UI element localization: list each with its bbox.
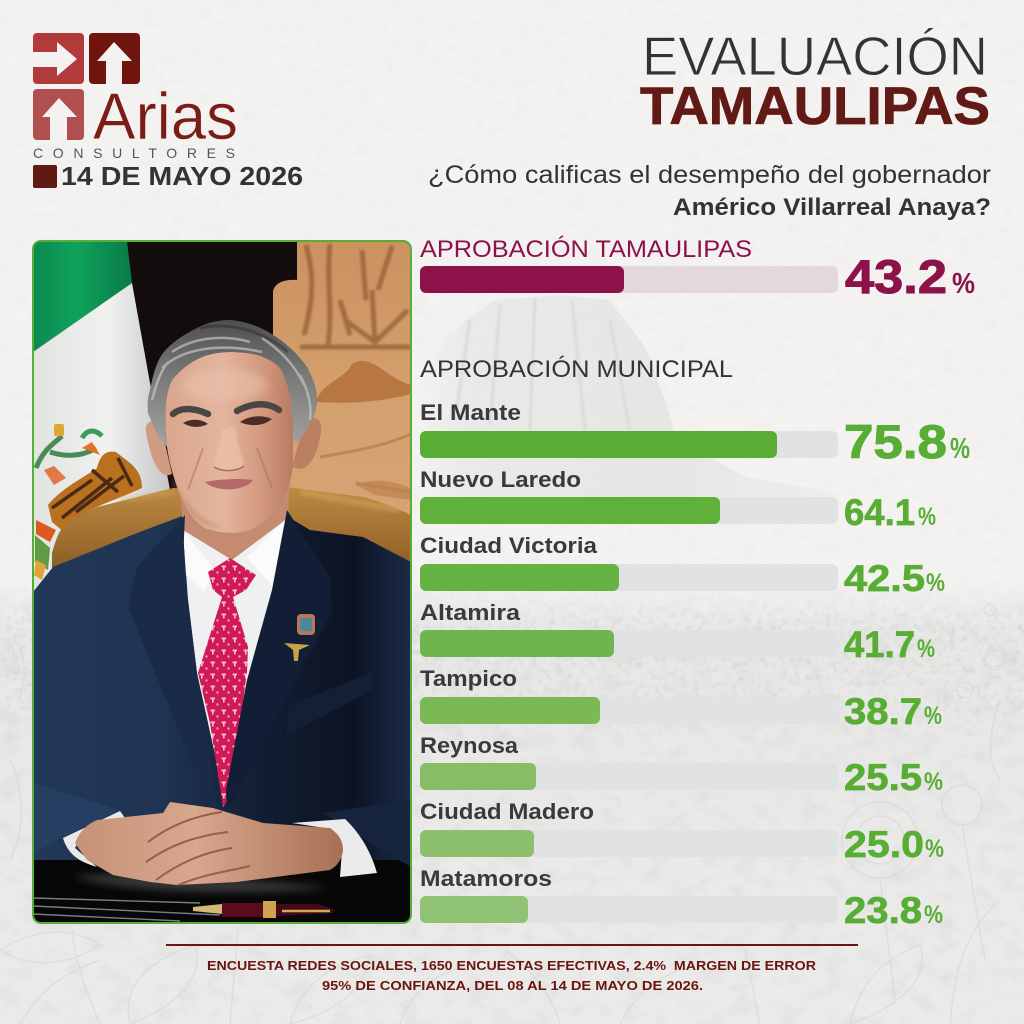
- collar and tie: [183, 517, 288, 807]
- heading: aprobación municipal: APROBACIÓN MUNICIPAL: [420, 356, 733, 383]
- icon: up arrow box dark: [89, 33, 140, 84]
- clasped hands: [75, 802, 343, 885]
- row: Matamoros: Matamoros: [420, 866, 552, 891]
- footer note: ENCUESTA REDES SOCIALES, 1650 ENCUESTAS EFECTIVAS, 2.4% MARGEN DE ERROR: [207, 958, 817, 973]
- desk: [33, 860, 411, 923]
- row: Tampico: [420, 666, 942, 732]
- row: Nuevo Laredo: 64.1: [844, 492, 915, 533]
- portrait photo: [33, 241, 411, 923]
- eyebrows: [173, 409, 208, 414]
- chair: [52, 487, 410, 568]
- icon: right arrow box: [33, 33, 84, 84]
- nose: [214, 426, 244, 471]
- logo subtitle: CONSULTORES: [33, 145, 235, 161]
- photo border: [33, 241, 411, 923]
- title: [640, 25, 990, 136]
- shirt cuffs: [63, 811, 377, 877]
- logo wordmark: Arias: [93, 79, 238, 153]
- row: Ciudad Madero: [420, 799, 944, 865]
- question: ¿Cómo calificas el desempeño del gobernador: [428, 161, 991, 189]
- row: Nuevo Laredo: Nuevo Laredo: [420, 467, 581, 492]
- flag: [33, 241, 170, 600]
- row: Nuevo Laredo: %: [918, 503, 936, 531]
- hair: [148, 320, 317, 447]
- row: Tampico: %: [924, 702, 942, 730]
- lapel pins: [284, 614, 315, 661]
- eyes: [183, 420, 208, 427]
- row: El Mante: %: [950, 433, 970, 465]
- row: Reynosa: [420, 733, 943, 798]
- background vegetation: [0, 604, 1005, 1024]
- row: El Mante: [420, 400, 970, 468]
- row: Altamira: %: [917, 635, 935, 663]
- row: Tampico: 38.7: [844, 691, 922, 732]
- heading: aprobación Tamaulipas: APROBACIÓN TAMAULIPAS: [420, 236, 752, 263]
- footer note: [166, 944, 858, 993]
- pen: [193, 901, 333, 918]
- background mountain: [418, 295, 838, 510]
- footer note: 95% DE CONFIANZA, DEL 08 AL 14 DE MAYO DE 2026.: [322, 978, 703, 993]
- suit: [33, 515, 411, 880]
- row: Reynosa: Reynosa: [420, 733, 519, 758]
- wood panel: [273, 242, 410, 514]
- municipal bar chart: [420, 400, 970, 931]
- row: Matamoros: [420, 866, 943, 931]
- question: Américo Villarreal Anaya?: [673, 194, 991, 221]
- row: Altamira: [420, 600, 935, 665]
- row: El Mante: El Mante: [420, 400, 521, 425]
- lapels: [128, 510, 372, 810]
- paper background: [0, 591, 1024, 1024]
- row: Ciudad Madero: %: [925, 835, 944, 863]
- bar: Tamaulipas: [420, 266, 838, 293]
- row: Matamoros: %: [924, 901, 943, 929]
- row: Reynosa: %: [924, 768, 943, 796]
- value: 43.2%: 43.2: [845, 250, 947, 303]
- state approval: [420, 236, 975, 303]
- row: Ciudad Victoria: Ciudad Victoria: [420, 533, 598, 558]
- logo: Arias Consultores: [33, 33, 238, 161]
- row: Ciudad Victoria: 42.5: [844, 558, 925, 599]
- row: Matamoros: 23.8: [844, 890, 922, 931]
- flag eagle: [34, 424, 142, 580]
- value: 43.2%: %: [952, 268, 975, 300]
- row: Altamira: 41.7: [844, 624, 915, 665]
- icon: up arrow box light: [33, 89, 84, 140]
- row: Ciudad Madero: 25.0: [844, 824, 924, 865]
- row: Tampico: Tampico: [420, 666, 517, 691]
- row: Altamira: Altamira: [420, 600, 521, 625]
- date: 14 DE MAYO 2026: [61, 161, 303, 191]
- sleeves: [33, 783, 411, 867]
- mouth: [205, 479, 253, 489]
- row: Reynosa: 25.5: [844, 757, 922, 798]
- row: Ciudad Victoria: %: [926, 569, 945, 597]
- row: Ciudad Madero: Ciudad Madero: [420, 799, 594, 824]
- question: [428, 161, 991, 221]
- row: Ciudad Victoria: [420, 533, 945, 599]
- title: TAMAULIPAS: [640, 77, 990, 136]
- row: Nuevo Laredo: [420, 467, 936, 533]
- shirt: [184, 520, 285, 757]
- row: El Mante: 75.8: [844, 415, 947, 468]
- neck and head: [146, 320, 321, 560]
- title: EVALUACIÓN: [642, 25, 988, 87]
